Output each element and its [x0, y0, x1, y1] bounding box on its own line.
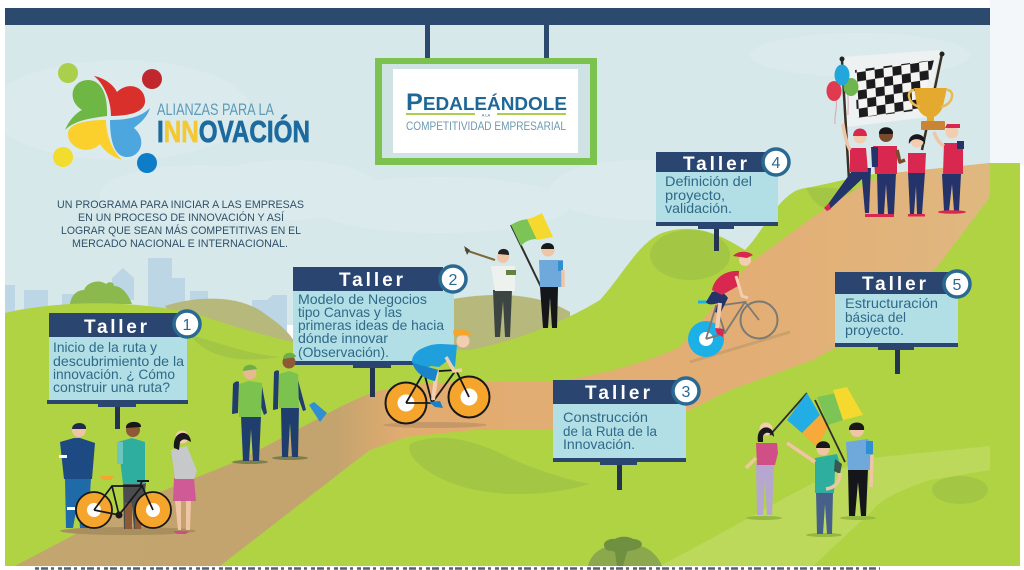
- sign 4: [656, 149, 789, 251]
- man in teal shirt: [787, 441, 842, 537]
- flag group lower right: [746, 387, 876, 537]
- sign 1 text: innovación. ¿ Cómo: [53, 366, 175, 382]
- bottom cropped text strip: [35, 567, 880, 570]
- sign 2 text: Modelo de Negocios: [298, 291, 427, 307]
- blue and orange flag: [770, 393, 828, 447]
- number 4: 4: [772, 155, 781, 172]
- sign 1 text: [53, 339, 184, 395]
- intro paragraph: UN PROGRAMA PARA INICIAR A LAS EMPRESAS: [57, 199, 304, 211]
- top bar: [5, 8, 990, 25]
- sign 3 text: Construcción: [563, 409, 648, 425]
- sign title text: PEDALEÁNDOLE: [406, 89, 567, 116]
- clouds: [0, 33, 970, 233]
- light path lower right: [660, 446, 990, 566]
- hanging title sign: A LA: [482, 112, 491, 118]
- hill shading: [190, 187, 988, 504]
- sign 2 heading: Taller: [339, 270, 404, 291]
- sign 4 text: [665, 173, 752, 216]
- green vest man B with megaphone: [272, 353, 327, 460]
- megaphone: [309, 402, 327, 422]
- man in red: [866, 127, 905, 217]
- sign 1 heading: Taller: [84, 317, 148, 338]
- green and yellow flag: [815, 387, 863, 462]
- intro paragraph: EN UN PROCESO DE INNOVACIÓN Y ASÍ: [78, 211, 285, 224]
- sign 1 text: descubrimiento de la: [53, 353, 184, 369]
- trophy: [909, 88, 952, 130]
- intro paragraph: MERCADO NACIONAL E INTERNACIONAL.: [72, 238, 288, 250]
- right margin panel: [990, 0, 1024, 165]
- sign 4 text: validación.: [665, 200, 732, 216]
- sign 3 heading: Taller: [585, 383, 651, 404]
- man in blue overalls: [59, 423, 95, 528]
- bicycle: [76, 476, 171, 528]
- woman in pink top: [746, 422, 782, 520]
- number 3: [673, 378, 699, 404]
- sign 2 text: dónde innovar: [298, 330, 388, 346]
- number 2: [440, 266, 466, 292]
- sign 5 text: básica del: [845, 309, 906, 325]
- trees: [70, 282, 132, 304]
- winners group: [824, 124, 966, 217]
- bush: [588, 537, 662, 566]
- number 1: 1: [183, 317, 192, 334]
- sign 5 text: Estructuración: [845, 295, 938, 311]
- flag man on hill: [511, 213, 563, 328]
- logo: Alianzas para la Innovación: [53, 63, 310, 173]
- man holding trophy: [934, 124, 966, 214]
- woman in red: [908, 134, 926, 216]
- sign 4 text: Definición del: [665, 173, 752, 189]
- sign 3 text: Innovación.: [563, 436, 635, 452]
- road: [15, 163, 990, 566]
- back hills: [165, 299, 305, 364]
- hanging title sign: [375, 25, 597, 165]
- number 3: 3: [682, 384, 691, 401]
- number 1: [174, 311, 200, 337]
- sign 3 text: [563, 409, 657, 452]
- sky background: [5, 25, 990, 325]
- runner woman: [824, 124, 872, 217]
- sign 2 text: tipo Canvas y las: [298, 304, 402, 320]
- man in blue shirt with black trousers: [840, 422, 876, 520]
- logo icon: [53, 63, 162, 173]
- sign 1 text: Inicio de la ruta y: [53, 339, 157, 355]
- trumpet man: [464, 246, 516, 337]
- balloons: [826, 64, 858, 124]
- woman in pink skirt: [171, 430, 197, 534]
- sign 4 text: proyecto,: [665, 187, 725, 203]
- number 2: 2: [449, 272, 458, 289]
- sign 2: [293, 266, 466, 397]
- cyclist 2: [383, 329, 490, 428]
- logo: Alianzas para la Innovación: INNOVACIÓN: [157, 113, 310, 149]
- sign 2 text: (Observación).: [298, 344, 389, 360]
- intro paragraph: [57, 199, 304, 250]
- cyclist 4: [688, 252, 790, 362]
- sign 5: [835, 271, 970, 374]
- finish flag: [840, 50, 944, 180]
- sign 5 heading: Taller: [862, 274, 927, 295]
- intro paragraph: LOGRAR QUE SEAN MÁS COMPETITIVAS EN EL: [61, 224, 301, 237]
- logo wordmark: ALIANZAS PARA LA: [157, 100, 274, 119]
- sign 1 text: construir una ruta?: [53, 379, 170, 395]
- sign 5 text: proyecto.: [845, 322, 904, 338]
- sign 4 heading: Taller: [683, 154, 748, 175]
- hanging title sign: COMPETITIVIDAD EMPRESARIAL: [406, 119, 566, 133]
- green vest man A: [232, 365, 268, 464]
- sign 2 text: primeras ideas de hacia: [298, 317, 444, 333]
- sign 5 text: [845, 295, 938, 338]
- man in teal: [117, 422, 146, 529]
- sign 3 text: de la Ruta de la: [563, 423, 657, 439]
- main green terrain: [5, 163, 1020, 566]
- group at start with bicycle: [59, 422, 197, 535]
- sign 3: [553, 378, 699, 490]
- skyline: [5, 258, 287, 345]
- number 5: 5: [953, 277, 962, 294]
- sign 1: [47, 311, 200, 429]
- sign 2 text: [298, 291, 444, 360]
